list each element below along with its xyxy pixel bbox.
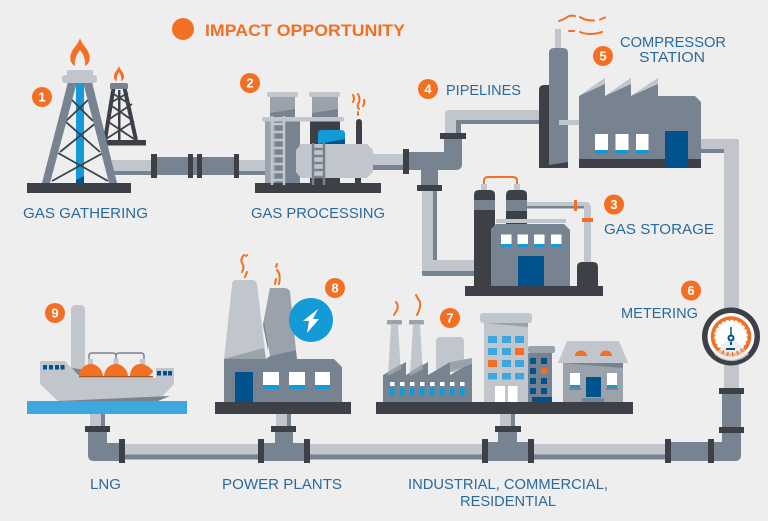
base: industrial platform xyxy=(376,402,633,414)
badge 2: 2 xyxy=(246,76,254,90)
icon: residential house xyxy=(558,341,628,402)
label: industrial, commercial, residential: INDUSTRIAL, COMMERCIAL, xyxy=(408,476,608,493)
icon: compressor station xyxy=(539,16,701,168)
pipe: compressor to meter xyxy=(700,139,739,312)
label: compressor station: STATION xyxy=(639,49,705,66)
label: gas storage: GAS STORAGE xyxy=(604,221,714,238)
legend: impact opportunity: IMPACT OPPORTUNITY xyxy=(205,21,406,40)
badge 1: 1 xyxy=(38,90,46,104)
icon: power plant xyxy=(215,255,351,414)
badge 7: 7 xyxy=(446,310,454,326)
badge 7 xyxy=(440,308,460,328)
badge 9 xyxy=(45,303,65,323)
badge 9: 9 xyxy=(51,306,59,320)
icon: electricity bolt xyxy=(289,298,333,342)
badge 8: 8 xyxy=(331,280,339,296)
label: compressor station xyxy=(620,34,726,66)
icon: LNG tanker ship xyxy=(27,305,187,414)
pipe: processing to junction and compressor xyxy=(372,110,540,186)
badge 8 xyxy=(325,278,345,298)
label: compressor station: COMPRESSOR xyxy=(620,34,726,51)
icon: gas storage xyxy=(465,177,603,296)
label: industrial, commercial, residential xyxy=(408,476,608,510)
label: metering: METERING xyxy=(621,305,698,322)
label: pipelines: PIPELINES xyxy=(446,82,521,99)
icon: large gas derrick with flame xyxy=(27,38,131,193)
badge 5: 5 xyxy=(599,48,607,64)
badge 1 xyxy=(32,87,52,107)
label: LNG: LNG xyxy=(90,476,121,493)
label: industrial, commercial, residential: RESIDENTIAL xyxy=(460,493,556,510)
badge 4: 4 xyxy=(424,82,432,96)
icon: industrial factory xyxy=(383,295,472,402)
badge 2 xyxy=(240,73,260,93)
icon: gas processing plant xyxy=(255,92,381,193)
badge 3: 3 xyxy=(610,197,618,212)
pipe: gathering to processing xyxy=(110,154,267,178)
label: power plants: POWER PLANTS xyxy=(222,476,342,493)
label: gas processing: GAS PROCESSING xyxy=(251,205,385,222)
icon: small oil derrick xyxy=(104,66,146,146)
label: gas gathering: GAS GATHERING xyxy=(23,205,148,222)
badge 6 xyxy=(681,280,701,300)
icon: metering gauge xyxy=(702,308,760,366)
badge 6: 6 xyxy=(687,283,695,298)
icon: commercial buildings xyxy=(480,313,555,402)
badge 3 xyxy=(604,194,624,214)
pipe: junction to gas storage xyxy=(417,185,475,276)
pipe: distribution main xyxy=(85,362,744,463)
badge 4 xyxy=(418,79,438,99)
badge 5 xyxy=(593,46,613,66)
